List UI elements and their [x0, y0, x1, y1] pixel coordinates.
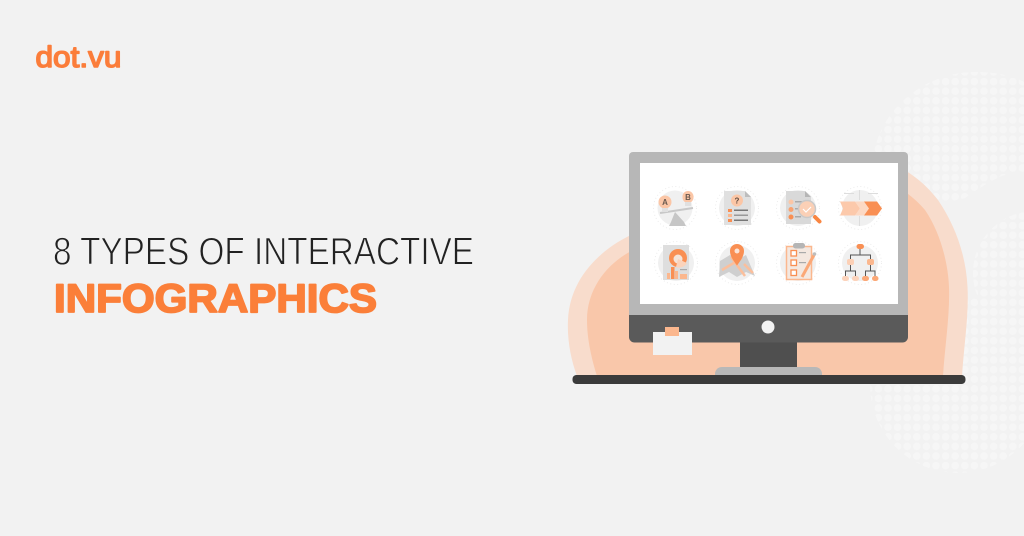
monitor stand [740, 342, 797, 369]
icon: A/B test: B [685, 193, 691, 202]
monitor base [715, 367, 822, 375]
icon: checklist clipboard [776, 242, 820, 284]
icon: A/B test: A [662, 198, 668, 207]
background blob dark [587, 180, 949, 376]
icon: map pin [716, 242, 758, 284]
monitor screen [640, 163, 898, 304]
title line: 8 types of interactive: 8 TYPES OF INTERACTIVE [53, 230, 474, 273]
desk [572, 375, 966, 384]
sticky note [653, 327, 692, 355]
icon: org chart [838, 242, 882, 284]
monitor bezel [629, 152, 908, 316]
illustration: monitor on desk [568, 152, 968, 384]
icon: infographic report [654, 242, 698, 284]
icon: report with magnifier [776, 186, 820, 230]
monitor chin [629, 315, 908, 342]
background blob light [568, 160, 968, 376]
icon: quiz document [716, 186, 758, 230]
logo: dot.vu [36, 41, 122, 74]
dotted background pattern [870, 72, 1024, 473]
icon: quiz document: ? [735, 196, 740, 206]
title line: infographics: INFOGRAPHICS [54, 277, 377, 321]
monitor power button [762, 320, 774, 334]
icon: process arrows [838, 186, 882, 230]
icon: A/B test [654, 186, 696, 230]
